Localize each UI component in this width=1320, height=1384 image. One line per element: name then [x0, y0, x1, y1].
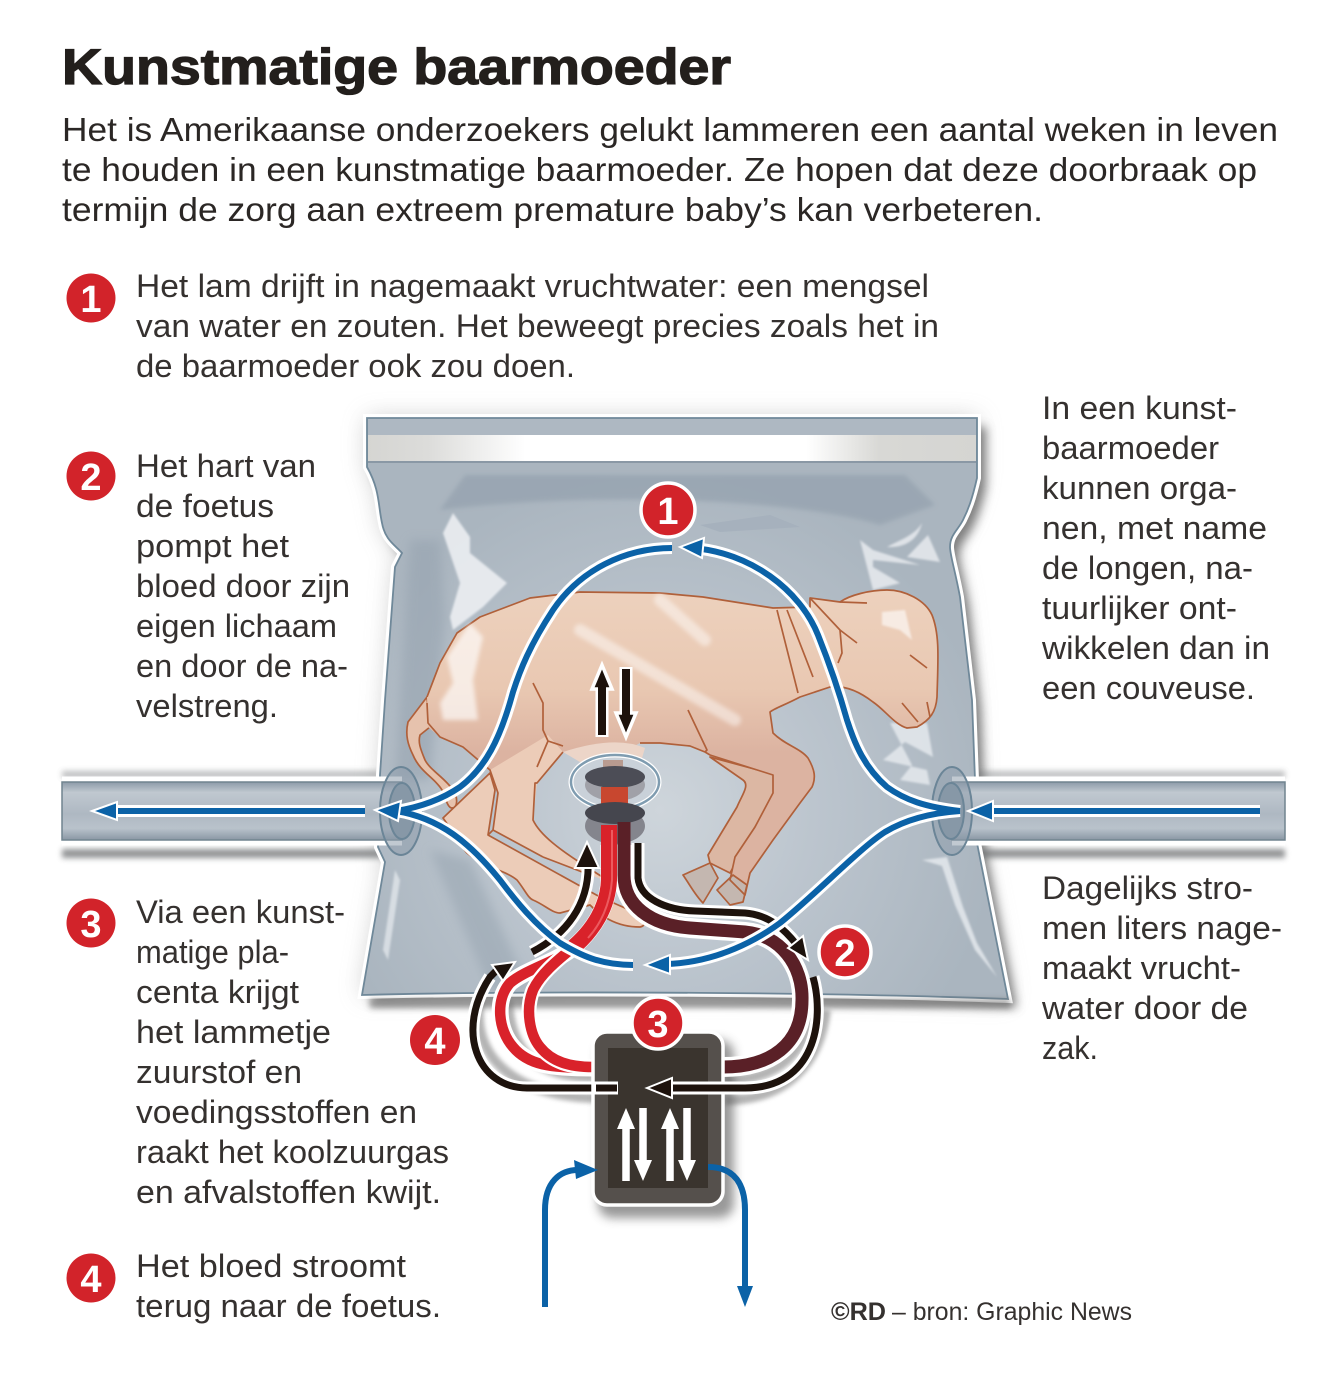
step 4 text [66, 1248, 441, 1324]
number badge 1 [641, 483, 695, 537]
step 2 text: Het hart van [136, 448, 316, 484]
step 3 text: het lammetje [136, 1014, 331, 1050]
step 1 text: 1 [80, 279, 102, 321]
bag shadow [362, 418, 1017, 1008]
tail [407, 697, 457, 808]
step 2 text [66, 448, 350, 724]
intro text: Het is Amerikaanse onderzoekers gelukt lammeren een aantal weken in leven [62, 111, 1278, 148]
step 3 text: Via een kunst- [136, 894, 345, 930]
step 2 text: en door de na- [136, 648, 348, 684]
intro text: te houden in een kunstmatige baarmoeder. Ze hopen dat deze doorbraak op [62, 151, 1257, 188]
shadows under vessels [479, 1000, 826, 1100]
plastic bag [362, 418, 1008, 999]
step 1 text: Het lam drijft in nagemaakt vruchtwater: een mengsel [136, 268, 929, 304]
water in and out arrows [545, 1160, 753, 1307]
number badge 4 [410, 1015, 460, 1065]
artificial placenta box [593, 1032, 726, 1205]
number badge 1: 1 [657, 491, 679, 533]
side note: daily litres: zak. [1042, 1030, 1098, 1066]
number badge 3 [632, 997, 684, 1049]
right plastic highlights [860, 523, 940, 590]
hooves [683, 863, 747, 905]
flow arrows: blood [473, 842, 817, 1088]
side note: organs: In een kunst- [1042, 390, 1237, 426]
pipe shadows [62, 771, 1285, 858]
number badge 4: 4 [424, 1021, 446, 1063]
step 3 text: en afvalstoffen kwijt. [136, 1174, 441, 1210]
side note: organs: baarmoeder [1042, 430, 1219, 466]
left plastic highlight [443, 513, 507, 630]
far hind leg [443, 773, 644, 927]
side note: daily litres: water door de [1041, 990, 1248, 1026]
step 1 text: de baarmoeder ook zou doen. [136, 348, 575, 384]
lamb outline [427, 590, 938, 895]
number badge 2 [819, 926, 871, 978]
plastic shading [440, 475, 935, 525]
side note: organs: tuurlijker ont- [1042, 590, 1237, 626]
white exchange arrows [626, 1108, 687, 1181]
bag bottom shadow [370, 999, 1010, 1008]
step 3 text: zuurstof en [136, 1054, 302, 1090]
step 3 text: centa krijgt [136, 974, 299, 1010]
flow arrows: amniotic fluid [92, 538, 1260, 974]
side note: organs: nen, met name [1042, 510, 1267, 546]
step 4 text: terug naar de foetus. [136, 1288, 441, 1324]
credit: ©RD [831, 1298, 886, 1326]
head highlight [882, 610, 912, 640]
step 1 text [66, 268, 939, 384]
side note: organs: de longen, na- [1042, 550, 1253, 586]
side note: daily litres: Dagelijks stro- [1042, 870, 1253, 906]
umbilical connector [563, 742, 659, 844]
credit: – bron: Graphic News [892, 1298, 1132, 1326]
side note: organs: kunnen orga- [1042, 470, 1237, 506]
belly arrows [592, 665, 636, 737]
step 3 text: 3 [80, 904, 102, 946]
title: Kunstmatige baarmoeder [62, 39, 731, 95]
skin folds and eye [427, 598, 930, 857]
far front leg [708, 757, 777, 873]
pipes [62, 779, 1285, 843]
step 2 text: bloed door zijn [136, 568, 350, 604]
number badge 2: 2 [834, 933, 856, 975]
lower left plastic streak [383, 870, 400, 960]
lamb [407, 590, 938, 927]
side note: organs: wikkelen dan in [1041, 630, 1270, 666]
intro text [62, 111, 1278, 228]
blood vessels [500, 822, 802, 1068]
body fill [427, 590, 938, 895]
side note: organs: een couveuse. [1042, 670, 1255, 706]
step 3 text: raakt het koolzuurgas [136, 1134, 449, 1170]
intro text: termijn de zorg aan extreem premature baby’s kan verbeteren. [62, 191, 1043, 228]
side note: daily litres: maakt vrucht- [1042, 950, 1241, 986]
step 3 text: matige pla- [136, 934, 289, 970]
near hind leg fill [490, 735, 610, 882]
step 2 text: de foetus [136, 488, 274, 524]
rump highlight [440, 623, 483, 720]
step 4 text: Het bloed stroomt [136, 1248, 406, 1284]
pipe flanges [380, 767, 972, 855]
side note: daily litres: men liters nage- [1042, 910, 1282, 946]
step 4 text: 4 [80, 1259, 102, 1301]
step 2 text: 2 [80, 457, 102, 499]
step 2 text: eigen lichaam [136, 608, 337, 644]
step 1 text: van water en zouten. Het beweegt precies zoals het in [136, 308, 939, 344]
diagram: artificial womb [62, 418, 1285, 1307]
step 3 text: voedingsstoffen en [136, 1094, 417, 1130]
side note: organs [1041, 390, 1270, 706]
lower right plastic streaks [883, 723, 997, 977]
step 3 text [66, 894, 449, 1210]
step 2 text: velstreng. [136, 688, 278, 724]
step 2 text: pompt het [136, 528, 289, 564]
side note: daily litres [1041, 870, 1282, 1066]
belly highlight [580, 600, 735, 720]
number badge 3: 3 [647, 1004, 669, 1046]
box shadow [598, 1040, 734, 1218]
